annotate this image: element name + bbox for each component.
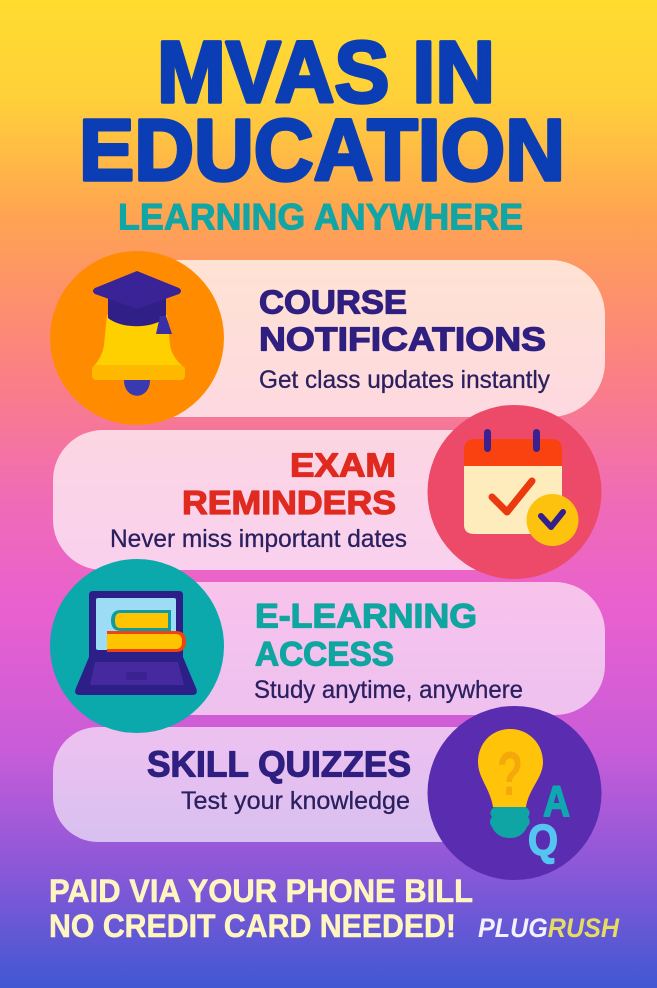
icon: bell with graduation cap: [50, 251, 224, 425]
heading: EXAM: [290, 446, 396, 484]
logo: PlugRush: PLUGRUSH: [478, 913, 619, 943]
panel: exam reminders: [53, 405, 602, 579]
icon: light bulb with Q and A: ?: [497, 740, 523, 809]
icon: laptop with books: [50, 559, 224, 733]
heading: REMINDERS: [182, 484, 396, 521]
panel: skill quizzes: [53, 706, 602, 880]
description: Get class updates instantly: [259, 366, 550, 394]
subtitle: LEARNING ANYWHERE: [118, 196, 523, 238]
heading: ACCESS: [255, 636, 394, 674]
icon: light bulb with Q and A: [428, 706, 602, 880]
heading: COURSE: [259, 284, 407, 320]
heading: E-LEARNING: [255, 598, 477, 636]
description: Never miss important dates: [110, 525, 407, 553]
icon: calendar: [428, 405, 602, 579]
heading: SKILL QUIZZES: [147, 744, 411, 784]
heading: [255, 598, 477, 674]
footer text: NO CREDIT CARD NEEDED!: [49, 908, 456, 944]
icon: light bulb with Q and A: A: [543, 777, 570, 826]
title: EDUCATION: [79, 102, 565, 199]
description: Study anytime, anywhere: [254, 676, 523, 704]
icon: light bulb with Q and A: Q: [528, 816, 558, 865]
panel: e-learning access: [50, 559, 605, 733]
footer text: PAID VIA YOUR PHONE BILL: [49, 873, 473, 909]
description: Test your knowledge: [181, 787, 410, 815]
title: MVAS IN: [157, 24, 495, 121]
panel: course notifications: [50, 251, 605, 425]
heading: [259, 284, 546, 358]
title: [79, 24, 565, 199]
heading: NOTIFICATIONS: [259, 320, 546, 358]
footer text: [49, 873, 473, 944]
heading: [182, 446, 396, 521]
